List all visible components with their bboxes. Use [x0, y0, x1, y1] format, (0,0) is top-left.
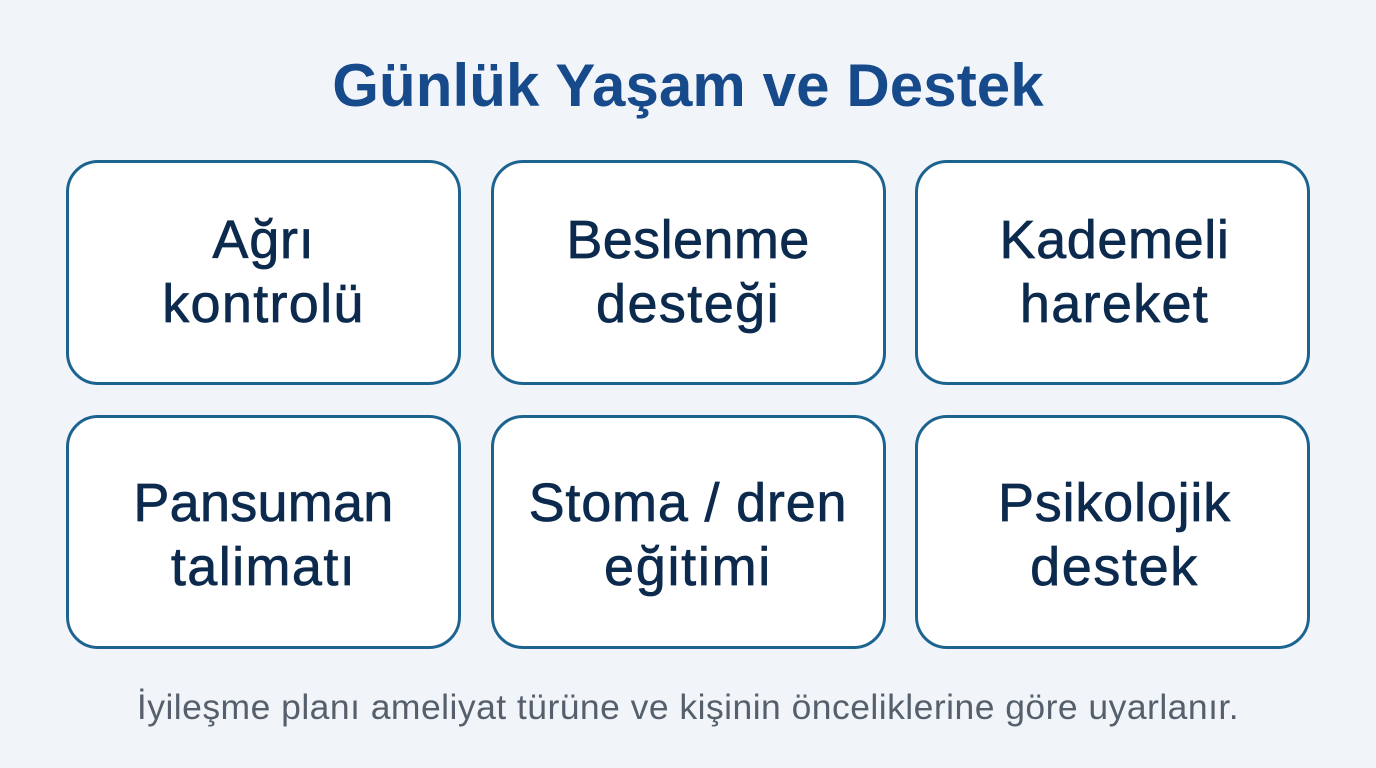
panel: Pansuman talimatı: Pansuman [133, 473, 394, 533]
panel: Psikolojik destek [915, 415, 1310, 649]
panel: Kademeli hareket: Kademeli [1000, 210, 1229, 270]
panel: Stoma / dren eğitimi [490, 415, 886, 649]
panel: Kademeli hareket [915, 160, 1310, 385]
panel: Pansuman talimatı [66, 415, 461, 649]
panel: Beslenme desteği [490, 160, 886, 385]
footer note: İyileşme planı ameliyat türüne ve kişinin önceliklerine göre uyarlanır. [137, 687, 1239, 727]
panel: Ağrı kontrolü: kontrolü [162, 274, 365, 334]
panel: Beslenme desteği: desteği [596, 274, 780, 334]
title: Günlük Yaşam ve Destek [332, 52, 1044, 119]
panel: Stoma / dren eğitimi: eğitimi [604, 537, 772, 597]
panel: Psikolojik destek: Psikolojik [998, 473, 1231, 533]
panel: Ağrı kontrolü: Ağrı [212, 210, 315, 270]
panel: Pansuman talimatı: talimatı [171, 537, 356, 597]
panel: Ağrı kontrolü [66, 160, 461, 385]
panel: Stoma / dren eğitimi: Stoma / dren [529, 473, 847, 533]
panel: Beslenme desteği: Beslenme [566, 210, 810, 270]
panel: Psikolojik destek: destek [1030, 537, 1199, 597]
panel: Kademeli hareket: hareket [1020, 274, 1209, 334]
